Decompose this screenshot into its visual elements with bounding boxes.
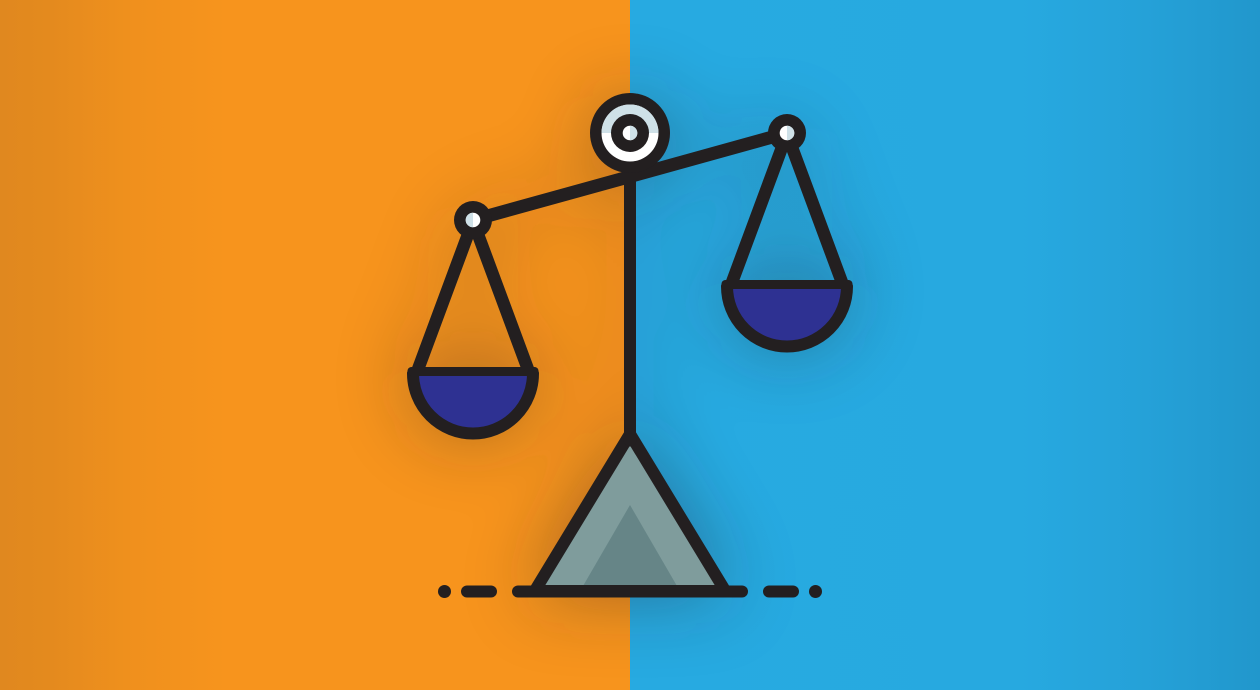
central pivot xyxy=(590,93,670,173)
triangular base xyxy=(535,434,725,591)
scale beam xyxy=(473,133,787,220)
panel: orange left background xyxy=(0,0,630,690)
center post xyxy=(624,165,636,435)
soft shadow behind scale xyxy=(413,95,847,591)
panel: blue right background xyxy=(630,0,1260,690)
right pivot xyxy=(768,114,806,152)
ground line with dashes xyxy=(438,585,822,598)
right pan with strings xyxy=(722,134,852,346)
left pan with strings xyxy=(408,221,538,434)
icon: balance scale xyxy=(408,93,852,598)
left pivot xyxy=(454,201,492,239)
